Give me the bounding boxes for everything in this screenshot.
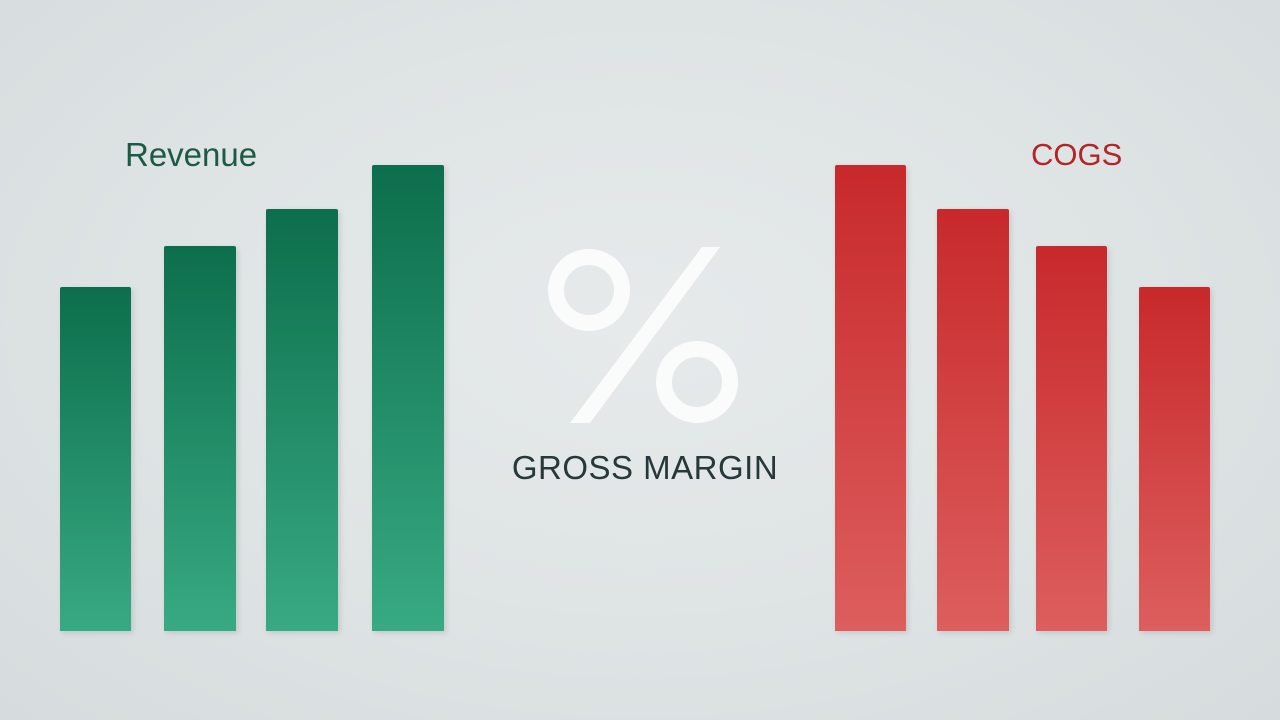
bar: cogs 2 (937, 209, 1009, 631)
bar: cogs 3 (1036, 246, 1107, 631)
bar: cogs 1 (835, 165, 906, 631)
bar: cogs 4 (1139, 287, 1210, 631)
bar: revenue 4 (372, 165, 444, 631)
icon: percent sign (548, 247, 738, 423)
bar: revenue 1 (60, 287, 131, 631)
bar chart: revenue (60, 165, 448, 634)
label: Revenue: Revenue (125, 136, 257, 173)
bar: revenue 3 (266, 209, 338, 631)
heading: gross margin: GROSS MARGIN (512, 449, 778, 486)
label: COGS: COGS (1031, 137, 1122, 172)
bar: revenue 2 (164, 246, 236, 631)
bar chart: COGS (835, 165, 1214, 634)
